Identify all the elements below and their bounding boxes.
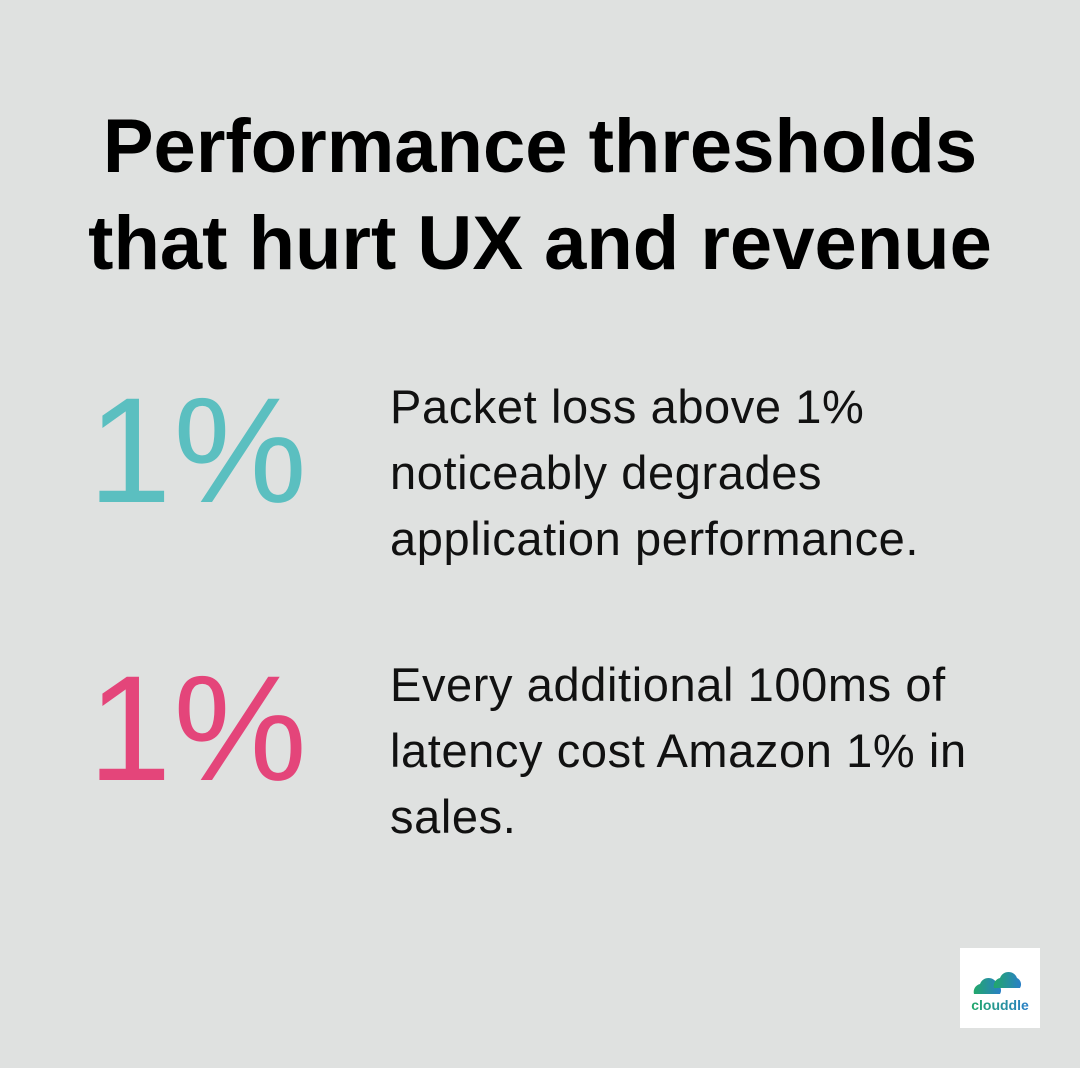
stat 1 text: noticeably degrades (390, 446, 822, 499)
title (88, 104, 992, 286)
stat 2 number: 1% (88, 644, 309, 812)
stat 2 text: Every additional 100ms of (390, 658, 946, 711)
stat 1 number: 1% (88, 366, 309, 534)
stat 1 text (390, 380, 919, 565)
stat 2 text: sales. (390, 790, 516, 843)
stat 2 text: latency cost Amazon 1% in (390, 724, 967, 777)
title: that hurt UX and revenue (88, 201, 992, 286)
stat 1 text: Packet loss above 1% (390, 380, 864, 433)
stat 2 text (390, 658, 967, 843)
logo (960, 948, 1040, 1028)
logo: clouddle (971, 997, 1029, 1013)
stat 1 text: application performance. (390, 512, 919, 565)
title: Performance thresholds (103, 104, 977, 189)
